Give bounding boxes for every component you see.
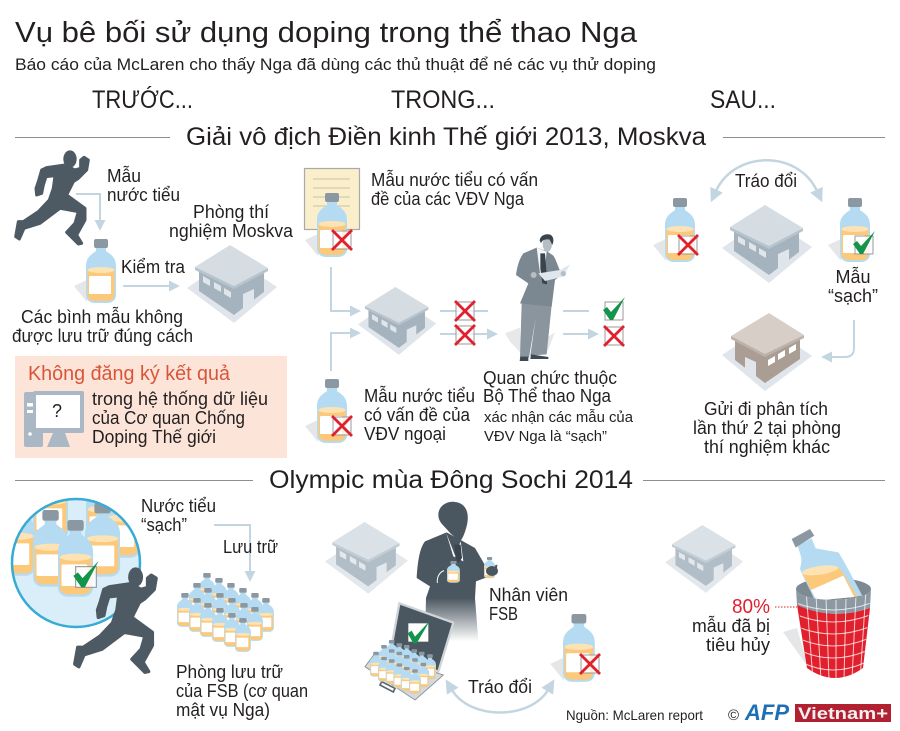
icon: waste bin with bottle (783, 529, 871, 680)
icon: Russian athletes' bottle (305, 193, 352, 257)
callout background (15, 356, 287, 458)
label: store: Lưu trữ (223, 537, 278, 557)
label: clean urine (141, 496, 216, 535)
label: urine sample: Mẫu (107, 165, 141, 186)
label: foreign problem samples: Mẫu nước tiểu (364, 385, 475, 406)
label: urine sample: nước tiểu (107, 185, 180, 205)
label: FSB agent: Nhân viên (489, 585, 568, 605)
icon: clean bottle (828, 198, 875, 262)
icon: official reading (505, 234, 570, 361)
label: samples destroyed: tiêu hủy (706, 635, 770, 655)
arrow: to second lab (831, 320, 854, 357)
label: official: xác nhận các mẫu của (484, 409, 634, 426)
icon: document (304, 168, 360, 230)
label: official (483, 368, 634, 445)
label: urine sample (107, 165, 180, 205)
label: official: Bộ Thể thao Nga (483, 386, 612, 406)
label: official: Quan chức thuộc (483, 368, 617, 388)
column: during: TRONG... (391, 86, 495, 114)
panel: 2013 during (304, 168, 634, 445)
arrow: swap (452, 690, 548, 712)
arrows: official to results (563, 311, 589, 334)
panel: 2013 after (653, 160, 878, 457)
label: problem samples Russian: Mẫu nước tiểu có vấn (371, 169, 538, 190)
label: FSB storage: mật vụ Nga) (176, 700, 270, 720)
icon: briefcase (365, 603, 453, 700)
icon: rejected marks (455, 301, 475, 345)
panel: 2013 before (12, 150, 294, 346)
callout text: trong hệ thống dữ liệu (92, 389, 268, 409)
icon: second lab (722, 313, 812, 391)
label: clean sample: “sạch” (828, 286, 878, 306)
column headers (92, 85, 776, 114)
section heading: Moscow 2013: Giải vô địch Điền kinh Thế giới 2013, Moskva (186, 123, 706, 151)
label: clean sample (828, 266, 878, 306)
label: check: Kiểm tra (121, 257, 186, 277)
icon: lab (665, 525, 743, 593)
label: swap: Tráo đổi (735, 171, 797, 191)
icon: lab (358, 287, 436, 355)
label: foreign problem samples (364, 385, 475, 444)
icon: stored bottles (177, 573, 274, 652)
arrow: top bottle to lab (331, 267, 351, 311)
panel: results not registered (15, 356, 287, 458)
label: FSB storage (176, 662, 308, 720)
subtitle: Báo cáo của McLaren cho thấy Nga đã dùng các thủ thuật để né các vụ thử doping (15, 55, 656, 74)
label: FSB storage: Phòng lưu trữ (176, 662, 283, 682)
label: Moscow lab (169, 202, 294, 241)
icon: computer (24, 391, 84, 447)
label: foreign problem samples: có vấn đề của (364, 405, 471, 425)
icon: runner (75, 567, 156, 672)
column: before: TRƯỚC... (92, 85, 193, 114)
panel: 2014 during (325, 502, 600, 712)
label: sent for second analysis: Gửi đi phân tích (704, 399, 828, 419)
icon: dirty bottle (653, 198, 698, 262)
label: swap: Tráo đổi (468, 677, 532, 697)
label: sent for second analysis: thí nghiệm khác (704, 437, 830, 457)
label: FSB agent (489, 585, 568, 624)
label: Moscow lab: nghiệm Moskva (169, 221, 294, 241)
icon: check result (603, 297, 625, 320)
callout text: Doping Thế giới (92, 427, 216, 447)
icon: FSB agent (417, 502, 498, 641)
arrow: runner to bottle (76, 194, 100, 221)
label: samples destroyed: mẫu đã bị (692, 615, 770, 636)
icon: lab (722, 205, 812, 283)
arrow: bottom bottle to lab (331, 333, 351, 371)
panel: 2014 before (10, 496, 307, 720)
icon: bottle (74, 239, 116, 303)
label: problem samples Russian (371, 169, 538, 209)
title: Vụ bê bối sử dụng doping trong thể thao Nga (15, 17, 638, 49)
icon: foreign athletes' bottle (305, 379, 352, 443)
arrow: swap (716, 160, 817, 191)
label: foreign problem samples: VĐV ngoại (364, 424, 446, 444)
label: sent for second analysis (693, 399, 841, 457)
label: clean urine: Nước tiểu (141, 496, 216, 516)
label: samples destroyed (692, 615, 770, 655)
icon: magnified bottles (10, 498, 142, 628)
icon: dirty bottle (550, 614, 600, 682)
label: FSB agent: FSB (489, 604, 518, 624)
dotted leader (775, 606, 797, 608)
label: Moscow lab: Phòng thí (193, 202, 269, 222)
section heading: Sochi 2014: Olympic mùa Đông Sochi 2014 (269, 466, 633, 494)
label: clean urine: “sạch” (141, 515, 187, 535)
label: sent for second analysis: lần thứ 2 tại phòng (693, 418, 841, 438)
icon: rejected result (604, 326, 624, 346)
logo: Vietnam+: Vietnam+ (798, 704, 888, 723)
callout text: của Cơ quan Chống (92, 408, 245, 428)
callout heading: Không đăng ký kết quả (28, 363, 231, 385)
icon: runner (16, 150, 88, 244)
icon: computer: ? (52, 401, 62, 421)
column: after: SAU... (710, 86, 776, 114)
callout text (92, 389, 268, 447)
label: official: VĐV Nga là “sạch” (484, 428, 607, 445)
arrows: lab to official (440, 311, 488, 334)
copyright: © (728, 707, 739, 724)
label: FSB storage: của FSB (cơ quan (176, 681, 308, 701)
icon: lab (325, 522, 408, 594)
source: Nguồn: McLaren report (566, 707, 703, 723)
icon: Moscow lab (187, 245, 277, 323)
label: bottles not stored properly: Các bình mẫu không (21, 306, 183, 327)
label: bottles not stored properly: được lưu trữ đúng cách (12, 326, 193, 346)
label: problem samples Russian: đề của các VĐV Nga (371, 189, 525, 209)
logo: AFP: AFP (744, 700, 789, 725)
arrow: check to lab (123, 285, 170, 287)
label: bottles not stored properly (12, 306, 193, 346)
stat: 80%: 80% (732, 596, 770, 618)
panel: 2014 after (665, 525, 871, 680)
label: clean sample: Mẫu (835, 266, 871, 287)
arrow: to storage (214, 525, 250, 572)
